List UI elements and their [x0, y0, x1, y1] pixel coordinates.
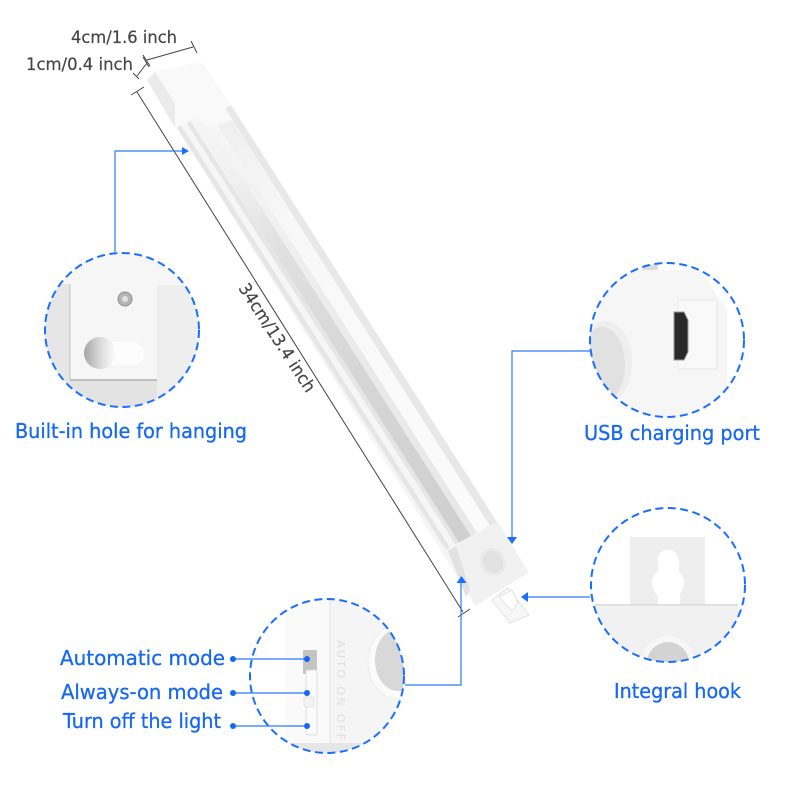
dimension: width 4cm	[71, 28, 197, 66]
callout: mode switch detail	[249, 598, 405, 754]
label: automatic mode with pointer: Automatic mode	[60, 646, 225, 670]
connector arrow: integral hook	[521, 592, 590, 602]
label: hanging hole: Built-in hole for hanging	[15, 419, 247, 443]
dimension: length 34cm: 34cm/13.4 inch	[234, 280, 319, 396]
light bar	[147, 62, 529, 623]
dimension: thickness 1cm: 1cm/0.4 inch	[26, 55, 133, 75]
callout: hanging hole detail	[45, 253, 199, 410]
label: always-on mode with pointer	[61, 680, 310, 704]
callout: mode switch detail: AUTO ON OFF	[334, 640, 347, 740]
label: integral hook: Integral hook	[614, 679, 741, 703]
label: turn off with pointer	[62, 709, 310, 733]
label: turn off with pointer: Turn off the light	[62, 709, 221, 733]
dimension: length 34cm	[131, 87, 470, 617]
callout: integral hook detail	[590, 507, 746, 663]
label: always-on mode with pointer: Always-on mode	[61, 680, 223, 704]
label: USB port: USB charging port	[584, 421, 760, 445]
connector arrow: USB port	[507, 351, 590, 544]
connector arrow: mode switch	[405, 576, 466, 685]
label: automatic mode with pointer	[60, 646, 310, 670]
connector arrow: hanging hole	[115, 147, 189, 252]
dimension: width 4cm: 4cm/1.6 inch	[71, 28, 177, 48]
callout: USB port detail	[579, 263, 747, 417]
